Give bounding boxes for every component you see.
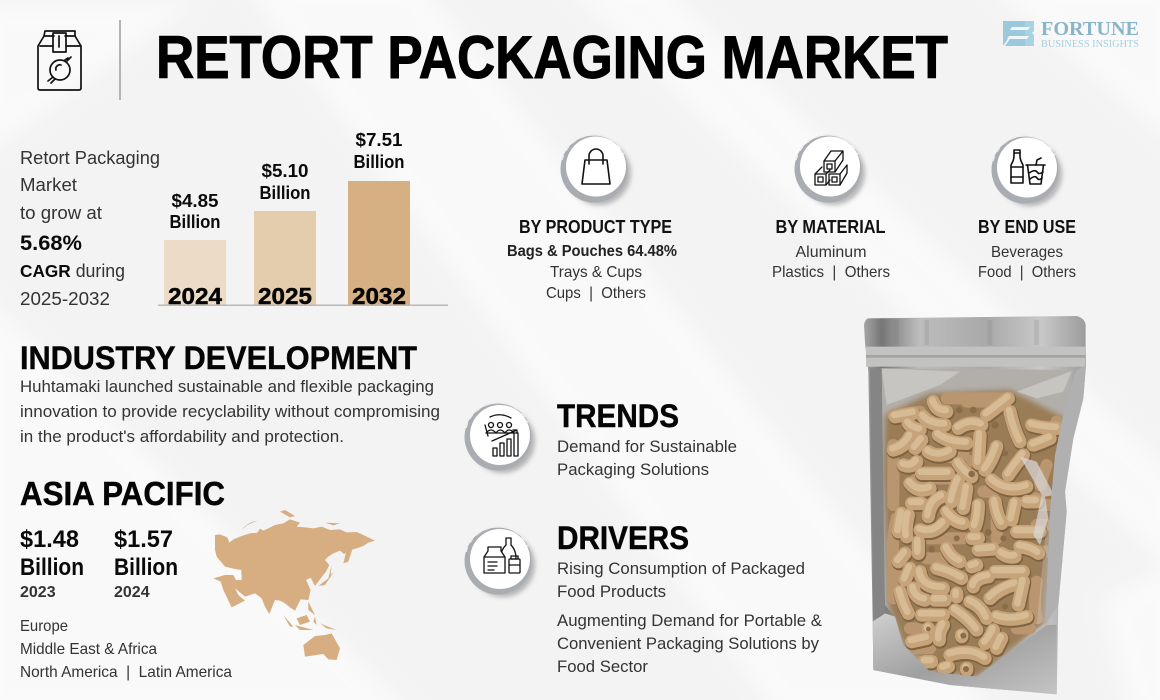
bar chart — [158, 130, 448, 309]
stat: 2023: Billion — [20, 554, 84, 581]
text block: industry development: in the product's affordability and protection. — [20, 427, 344, 446]
bar 2024: 2024 — [168, 283, 222, 309]
bar 2032: Billion — [354, 152, 404, 172]
segment: by product type: BY PRODUCT TYPE — [519, 217, 672, 237]
text block: drivers: Augmenting Demand for Portable & — [557, 611, 823, 630]
segment: by product type: Trays & Cups — [550, 264, 642, 281]
segment: by end use: Beverages — [991, 244, 1063, 261]
text block: other regions: Middle East & Africa — [20, 641, 157, 658]
bar 2024 — [164, 191, 226, 309]
map: asia pacific — [213, 510, 375, 660]
text block: industry development — [20, 377, 440, 446]
heading: trends: TRENDS — [557, 398, 679, 434]
text block: other regions: Europe — [20, 618, 68, 635]
icon: shopping bag — [560, 135, 631, 205]
text block: drivers: Rising Consumption of Packaged — [557, 559, 805, 578]
icon: material blocks — [794, 135, 865, 205]
segment: by end use: BY END USE — [978, 217, 1076, 237]
segment: by end use: Food | Others — [978, 264, 1076, 281]
icon: trends — [464, 403, 535, 473]
bar 2032 — [348, 130, 410, 309]
stat: 2023: $1.48 — [20, 526, 79, 553]
divider line — [119, 20, 121, 100]
text block: market growth — [20, 147, 160, 309]
segment: by material — [772, 217, 890, 281]
logo: Fortune Business Insights — [1003, 18, 1139, 50]
icon: bottle and cup — [992, 136, 1062, 206]
segment: by product type: Bags & Pouches 64.48% — [507, 243, 677, 260]
text block: market growth: to grow at — [20, 202, 102, 223]
heading: industry development: INDUSTRY DEVELOPMENT — [20, 340, 417, 376]
image: pouch of macaroni — [864, 316, 1086, 694]
segment: by material: BY MATERIAL — [776, 217, 886, 237]
heading: asia pacific: ASIA PACIFIC — [20, 475, 225, 512]
stat: 2024: $1.57 — [114, 526, 173, 553]
text block: industry development: Huhtamaki launched sustainable and flexible packaging — [20, 377, 434, 396]
bar 2025: 2025 — [258, 283, 312, 309]
text block: other regions — [20, 618, 232, 681]
bar 2024: Billion — [170, 212, 220, 232]
text block: drivers: Food Products — [557, 582, 666, 601]
text block: market growth: Retort Packaging — [20, 147, 160, 168]
bar 2032: $7.51 — [356, 130, 402, 150]
text block: other regions: North America | Latin America — [20, 664, 232, 681]
text block: drivers: Food Sector — [557, 657, 648, 676]
text block: market growth: Market — [20, 174, 77, 195]
logo: Fortune Business Insights: FORTUNE — [1041, 18, 1139, 40]
segment: by material: Plastics | Others — [772, 264, 890, 281]
icon: drivers — [464, 527, 535, 597]
stat: 2023: 2023 — [20, 584, 56, 601]
text block: drivers — [557, 559, 823, 676]
text block: market growth: CAGR during — [20, 261, 125, 281]
text block: drivers: Convenient Packaging Solutions by — [557, 634, 819, 653]
text block: industry development: innovation to provide recyclability without compromising — [20, 402, 440, 421]
text block: trends — [557, 437, 737, 479]
bar 2024: $4.85 — [172, 191, 218, 211]
text block: market growth: 5.68% — [20, 231, 82, 255]
stat: 2024: Billion — [114, 554, 178, 581]
segment: by product type: Cups | Others — [546, 285, 646, 302]
title: RETORT PACKAGING MARKET — [156, 24, 948, 91]
text block: trends: Packaging Solutions — [557, 460, 709, 479]
text block: market growth: 2025-2032 — [20, 288, 110, 309]
bar 2025: $5.10 — [262, 161, 308, 181]
macaroni pieces — [892, 397, 1057, 671]
segment: by product type — [507, 217, 677, 302]
icon: retort pouch — [38, 31, 81, 90]
bar 2032: 2032 — [352, 283, 406, 309]
logo: Fortune Business Insights: BUSINESS INSIGHTS — [1041, 39, 1139, 50]
stat: 2024 — [114, 526, 178, 601]
text block: trends: Demand for Sustainable — [557, 437, 737, 456]
bar 2025 — [254, 161, 316, 309]
heading: drivers: DRIVERS — [557, 520, 689, 556]
bar 2025: Billion — [260, 183, 310, 203]
stat: 2023 — [20, 526, 84, 601]
segment: by material: Aluminum — [796, 244, 866, 261]
stat: 2024: 2024 — [114, 584, 150, 601]
segment: by end use — [978, 217, 1076, 281]
